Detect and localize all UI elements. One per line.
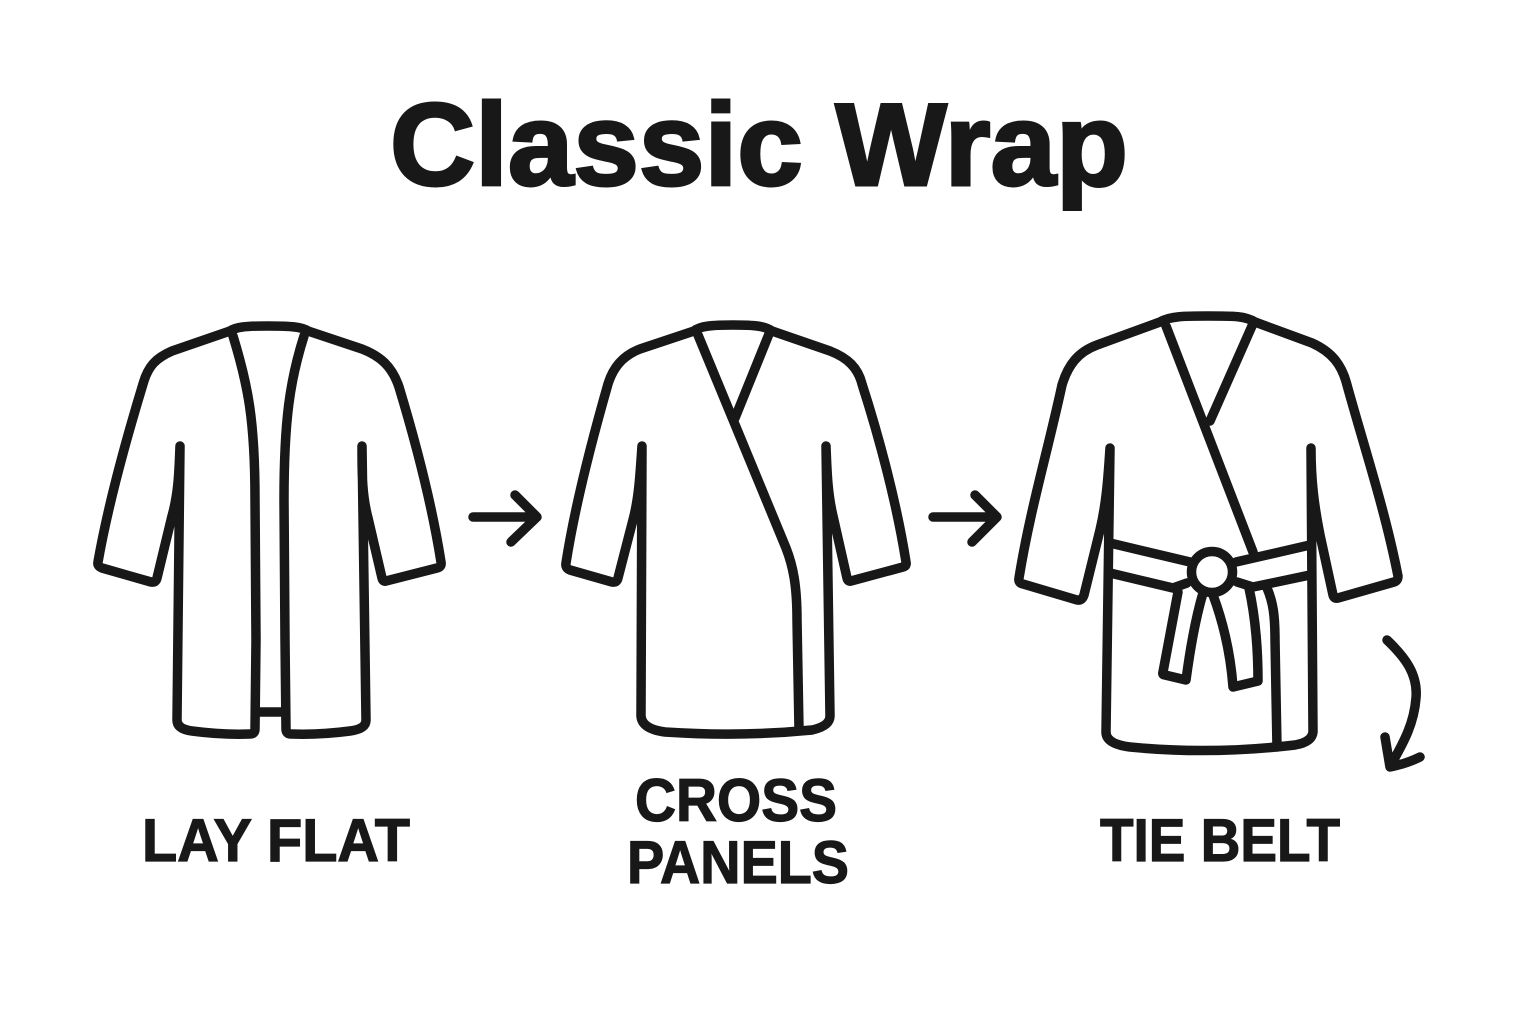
label: cross panels bbox=[627, 767, 849, 896]
arrow 1 bbox=[473, 495, 537, 542]
label: lay flat: LAY FLAT bbox=[142, 807, 410, 874]
robe 1: lay flat bbox=[98, 326, 441, 734]
label: cross panels: PANELS bbox=[627, 829, 849, 896]
robe 3: tie belt bbox=[1019, 316, 1398, 751]
robe 2: cross panels bbox=[566, 325, 906, 734]
label: cross panels: CROSS bbox=[635, 767, 837, 834]
curved arrow bbox=[1385, 640, 1420, 767]
label: tie belt: TIE BELT bbox=[1100, 807, 1340, 874]
arrow 2 bbox=[933, 495, 997, 542]
title: Classic Wrap bbox=[390, 79, 1128, 210]
